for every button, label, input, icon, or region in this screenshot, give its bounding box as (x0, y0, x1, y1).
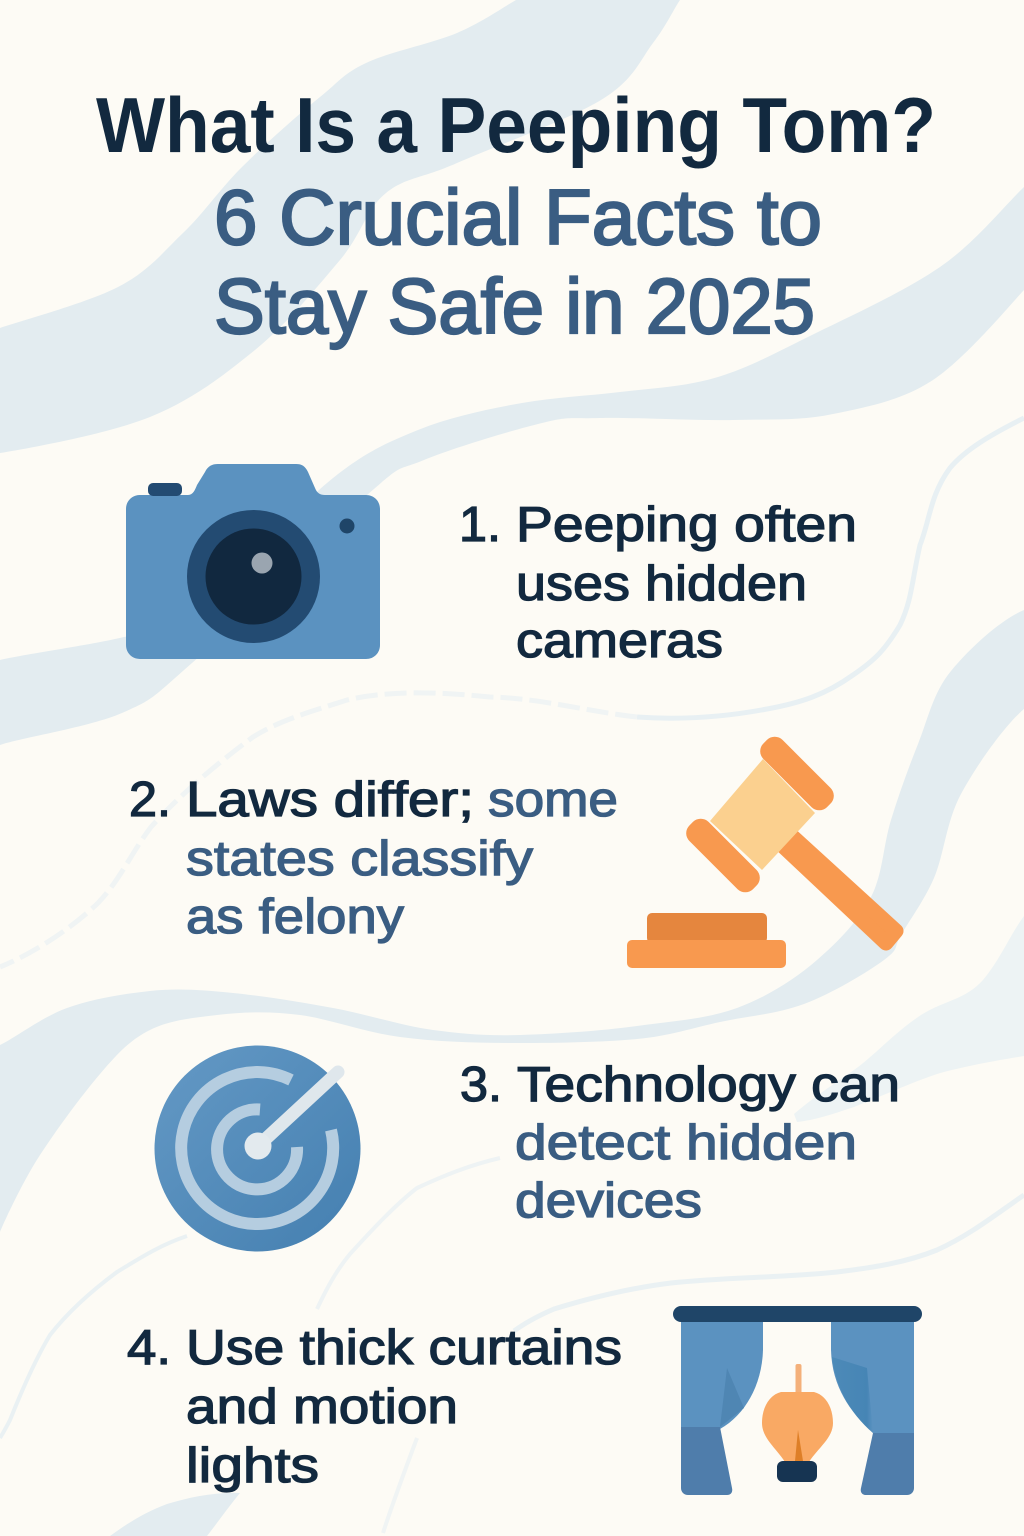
fact 3 text: 3. (460, 1058, 502, 1112)
icon: camera (126, 464, 380, 659)
heading line: what is a peeping tom: What Is a Peeping Tom? (96, 81, 936, 169)
fact 1 text: cameras (516, 614, 723, 668)
fact 2 text: Laws differ; (186, 773, 474, 827)
fact 2 text: states classify (186, 832, 534, 886)
subtitle line 1: 6 Crucial Facts to (214, 173, 822, 261)
right curtain (831, 1322, 914, 1495)
fact 1 text: Peeping often (516, 498, 857, 552)
fact 3 text: devices (515, 1174, 702, 1228)
lamp (762, 1364, 833, 1482)
fact 1 text (459, 498, 857, 668)
fact 3 text (460, 1058, 900, 1228)
fact 4 text: lights (186, 1439, 319, 1493)
left curtain (681, 1322, 763, 1495)
icon: radar detector (154, 1046, 360, 1252)
icon: gavel (627, 732, 896, 968)
fact 1 text: 1. (459, 498, 501, 552)
title (96, 81, 936, 350)
fact 2 text: as felony (186, 890, 405, 944)
fact 4 text (127, 1321, 622, 1493)
fact 2 text (129, 773, 618, 944)
curtain rod (673, 1306, 922, 1322)
fact 3 text: detect hidden (515, 1116, 857, 1170)
fact 2 text: some (488, 773, 618, 827)
subtitle line 2: Stay Safe in 2025 (214, 262, 815, 350)
fact 4 text: 4. (127, 1321, 171, 1375)
fact 3 text: Technology can (517, 1058, 900, 1112)
icon: curtains and lamp (673, 1306, 922, 1495)
fact 1 text: uses hidden (516, 557, 807, 611)
fact 4 text: Use thick curtains (186, 1321, 622, 1375)
fact 2 text: 2. (129, 773, 171, 827)
fact 4 text: and motion (186, 1380, 458, 1434)
